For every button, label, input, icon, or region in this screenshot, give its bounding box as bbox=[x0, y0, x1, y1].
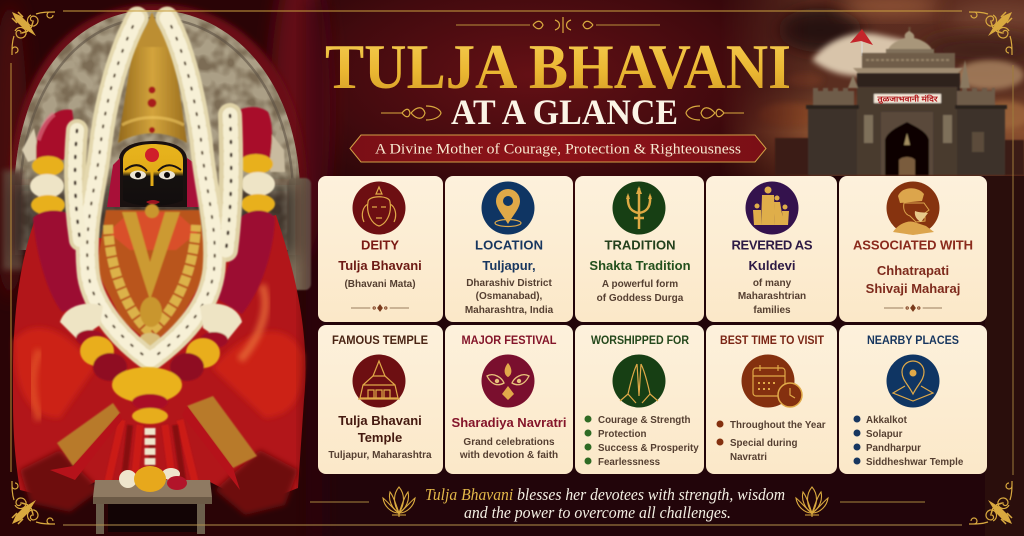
panel: deity: Tulja Bhavani bbox=[338, 258, 422, 273]
panel: revered as: REVERED AS bbox=[732, 238, 813, 252]
deity photograph bbox=[0, 0, 330, 536]
list: visit times bbox=[716, 420, 826, 463]
ribbon banner: A Divine Mother of Courage, Protection & Righteousness bbox=[375, 142, 741, 158]
list: worship benefits: Courage & Strength bbox=[598, 415, 691, 426]
central flower cluster bbox=[80, 336, 220, 470]
corner ornament: bottom left bbox=[12, 481, 55, 524]
white garland clusters bbox=[60, 304, 242, 348]
corner ornament: bottom right bbox=[969, 481, 1012, 524]
subtitle: at a glance: AT A GLANCE bbox=[451, 92, 678, 132]
side flower strands bbox=[22, 107, 285, 314]
panel: location: Maharashtra, India bbox=[465, 305, 554, 316]
panel: major festival: with devotion & faith bbox=[459, 450, 558, 461]
panel: famous temple: Tulja Bhavani bbox=[338, 413, 422, 428]
panel: worshipped for: WORSHIPPED FOR bbox=[591, 335, 690, 347]
panel: location: LOCATION bbox=[475, 238, 543, 252]
edge fade bbox=[306, 0, 330, 536]
icon: map with pin bbox=[886, 354, 940, 408]
icon: family bbox=[746, 182, 798, 234]
icon: lotus left bbox=[383, 487, 415, 517]
list: nearby places bbox=[854, 415, 964, 468]
panel: location: (Osmanabad), bbox=[476, 291, 543, 302]
icon: folded hands bbox=[612, 354, 666, 408]
necklace bbox=[96, 204, 208, 347]
temple scene bbox=[720, 0, 1024, 176]
panel: major festival: Sharadiya Navratri bbox=[452, 415, 566, 430]
panel: associated with bbox=[839, 176, 987, 322]
distant walls bbox=[775, 138, 1024, 175]
panel: nearby places: NEARBY PLACES bbox=[867, 335, 959, 347]
panel: revered as: families bbox=[753, 305, 791, 316]
list: worship benefits: Success & Prosperity bbox=[598, 443, 699, 454]
panel: major festival: Grand celebrations bbox=[463, 437, 555, 448]
panel: major festival: MAJOR FESTIVAL bbox=[462, 335, 556, 347]
panel: nearby places bbox=[839, 325, 987, 474]
panel: revered as: Maharashtrian bbox=[738, 291, 806, 302]
panel: location: Tuljapur, bbox=[482, 258, 536, 273]
list: nearby places: Akkalkot bbox=[866, 415, 908, 426]
corner ornament: top right bbox=[969, 12, 1012, 55]
list: worship benefits: Fearlessness bbox=[598, 457, 661, 468]
footer quote: Tulja Bhavani blesses her devotees with strength, wisdom bbox=[425, 485, 785, 504]
panel: deity: (Bhavani Mata) bbox=[344, 279, 416, 290]
panel: associated with: Shivaji Maharaj bbox=[866, 281, 960, 296]
white garlands bbox=[75, 18, 231, 360]
list: visit times: Navratri bbox=[730, 452, 767, 463]
footer quote bbox=[425, 485, 785, 522]
sky bbox=[720, 0, 1024, 176]
silver halo bbox=[9, 4, 308, 250]
panel: associated with: ASSOCIATED WITH bbox=[853, 238, 973, 252]
panel: deity: DEITY bbox=[361, 238, 399, 252]
list: visit times: Throughout the Year bbox=[730, 420, 826, 431]
title: TULJA BHAVANI bbox=[325, 31, 791, 102]
panel: famous temple bbox=[318, 325, 443, 474]
subtitle: at a glance bbox=[381, 92, 744, 132]
icon: goddess face bbox=[352, 182, 406, 234]
pillars and dark backing bbox=[3, 170, 311, 290]
temple sign: तुळजाभवानी मंदिर bbox=[876, 94, 939, 104]
panel: tradition: A powerful form bbox=[602, 279, 678, 290]
panel: associated with: Chhatrapati bbox=[877, 263, 949, 278]
list: nearby places: Pandharpur bbox=[866, 443, 921, 454]
panel: revered as: of many bbox=[753, 278, 792, 289]
panel: tradition: of Goddess Durga bbox=[597, 293, 684, 304]
crown bbox=[118, 12, 187, 143]
temple building bbox=[806, 27, 1007, 175]
face bbox=[107, 141, 199, 207]
panel: famous temple: Temple bbox=[358, 430, 402, 445]
list: worship benefits: Protection bbox=[598, 429, 646, 440]
panel: revered as: Kuldevi bbox=[749, 258, 795, 273]
icon: Shivaji portrait bbox=[886, 182, 940, 235]
list: worship benefits bbox=[584, 415, 699, 468]
panel: deity bbox=[318, 176, 443, 322]
footer quote: and the power to overcome all challenges. bbox=[464, 503, 731, 522]
panel: best time to visit bbox=[706, 325, 837, 474]
icon: trident bbox=[612, 182, 666, 234]
icon: lotus right bbox=[796, 487, 828, 517]
panel: tradition: TRADITION bbox=[604, 238, 676, 252]
list: visit times: Special during bbox=[730, 438, 798, 449]
red saree bbox=[13, 215, 306, 515]
panel: famous temple: FAMOUS TEMPLE bbox=[332, 335, 428, 347]
icon: calendar and clock bbox=[742, 354, 802, 408]
panel: revered as bbox=[706, 176, 837, 322]
footer decoration: lines bbox=[310, 501, 925, 503]
panel: location: Dharashiv District bbox=[466, 278, 552, 289]
flag bbox=[850, 29, 873, 56]
panel: tradition bbox=[575, 176, 704, 322]
icon: temple bbox=[352, 354, 406, 408]
panel: best time to visit: BEST TIME TO VISIT bbox=[720, 335, 824, 347]
icon: map pin bbox=[482, 182, 534, 234]
panel: worshipped for bbox=[575, 325, 704, 474]
panel: tradition: Shakta Tradition bbox=[589, 258, 691, 273]
list: nearby places: Solapur bbox=[866, 429, 903, 440]
panel: major festival bbox=[445, 325, 573, 474]
icon: durga eyes bbox=[482, 354, 534, 408]
top flourish bbox=[456, 17, 660, 33]
panel: famous temple: Tuljapur, Maharashtra bbox=[328, 450, 432, 461]
offering table bbox=[93, 466, 212, 534]
corner ornament: top left bbox=[12, 12, 55, 55]
panel: location bbox=[445, 176, 573, 322]
list: nearby places: Siddheshwar Temple bbox=[866, 457, 964, 468]
ribbon banner bbox=[350, 135, 766, 162]
